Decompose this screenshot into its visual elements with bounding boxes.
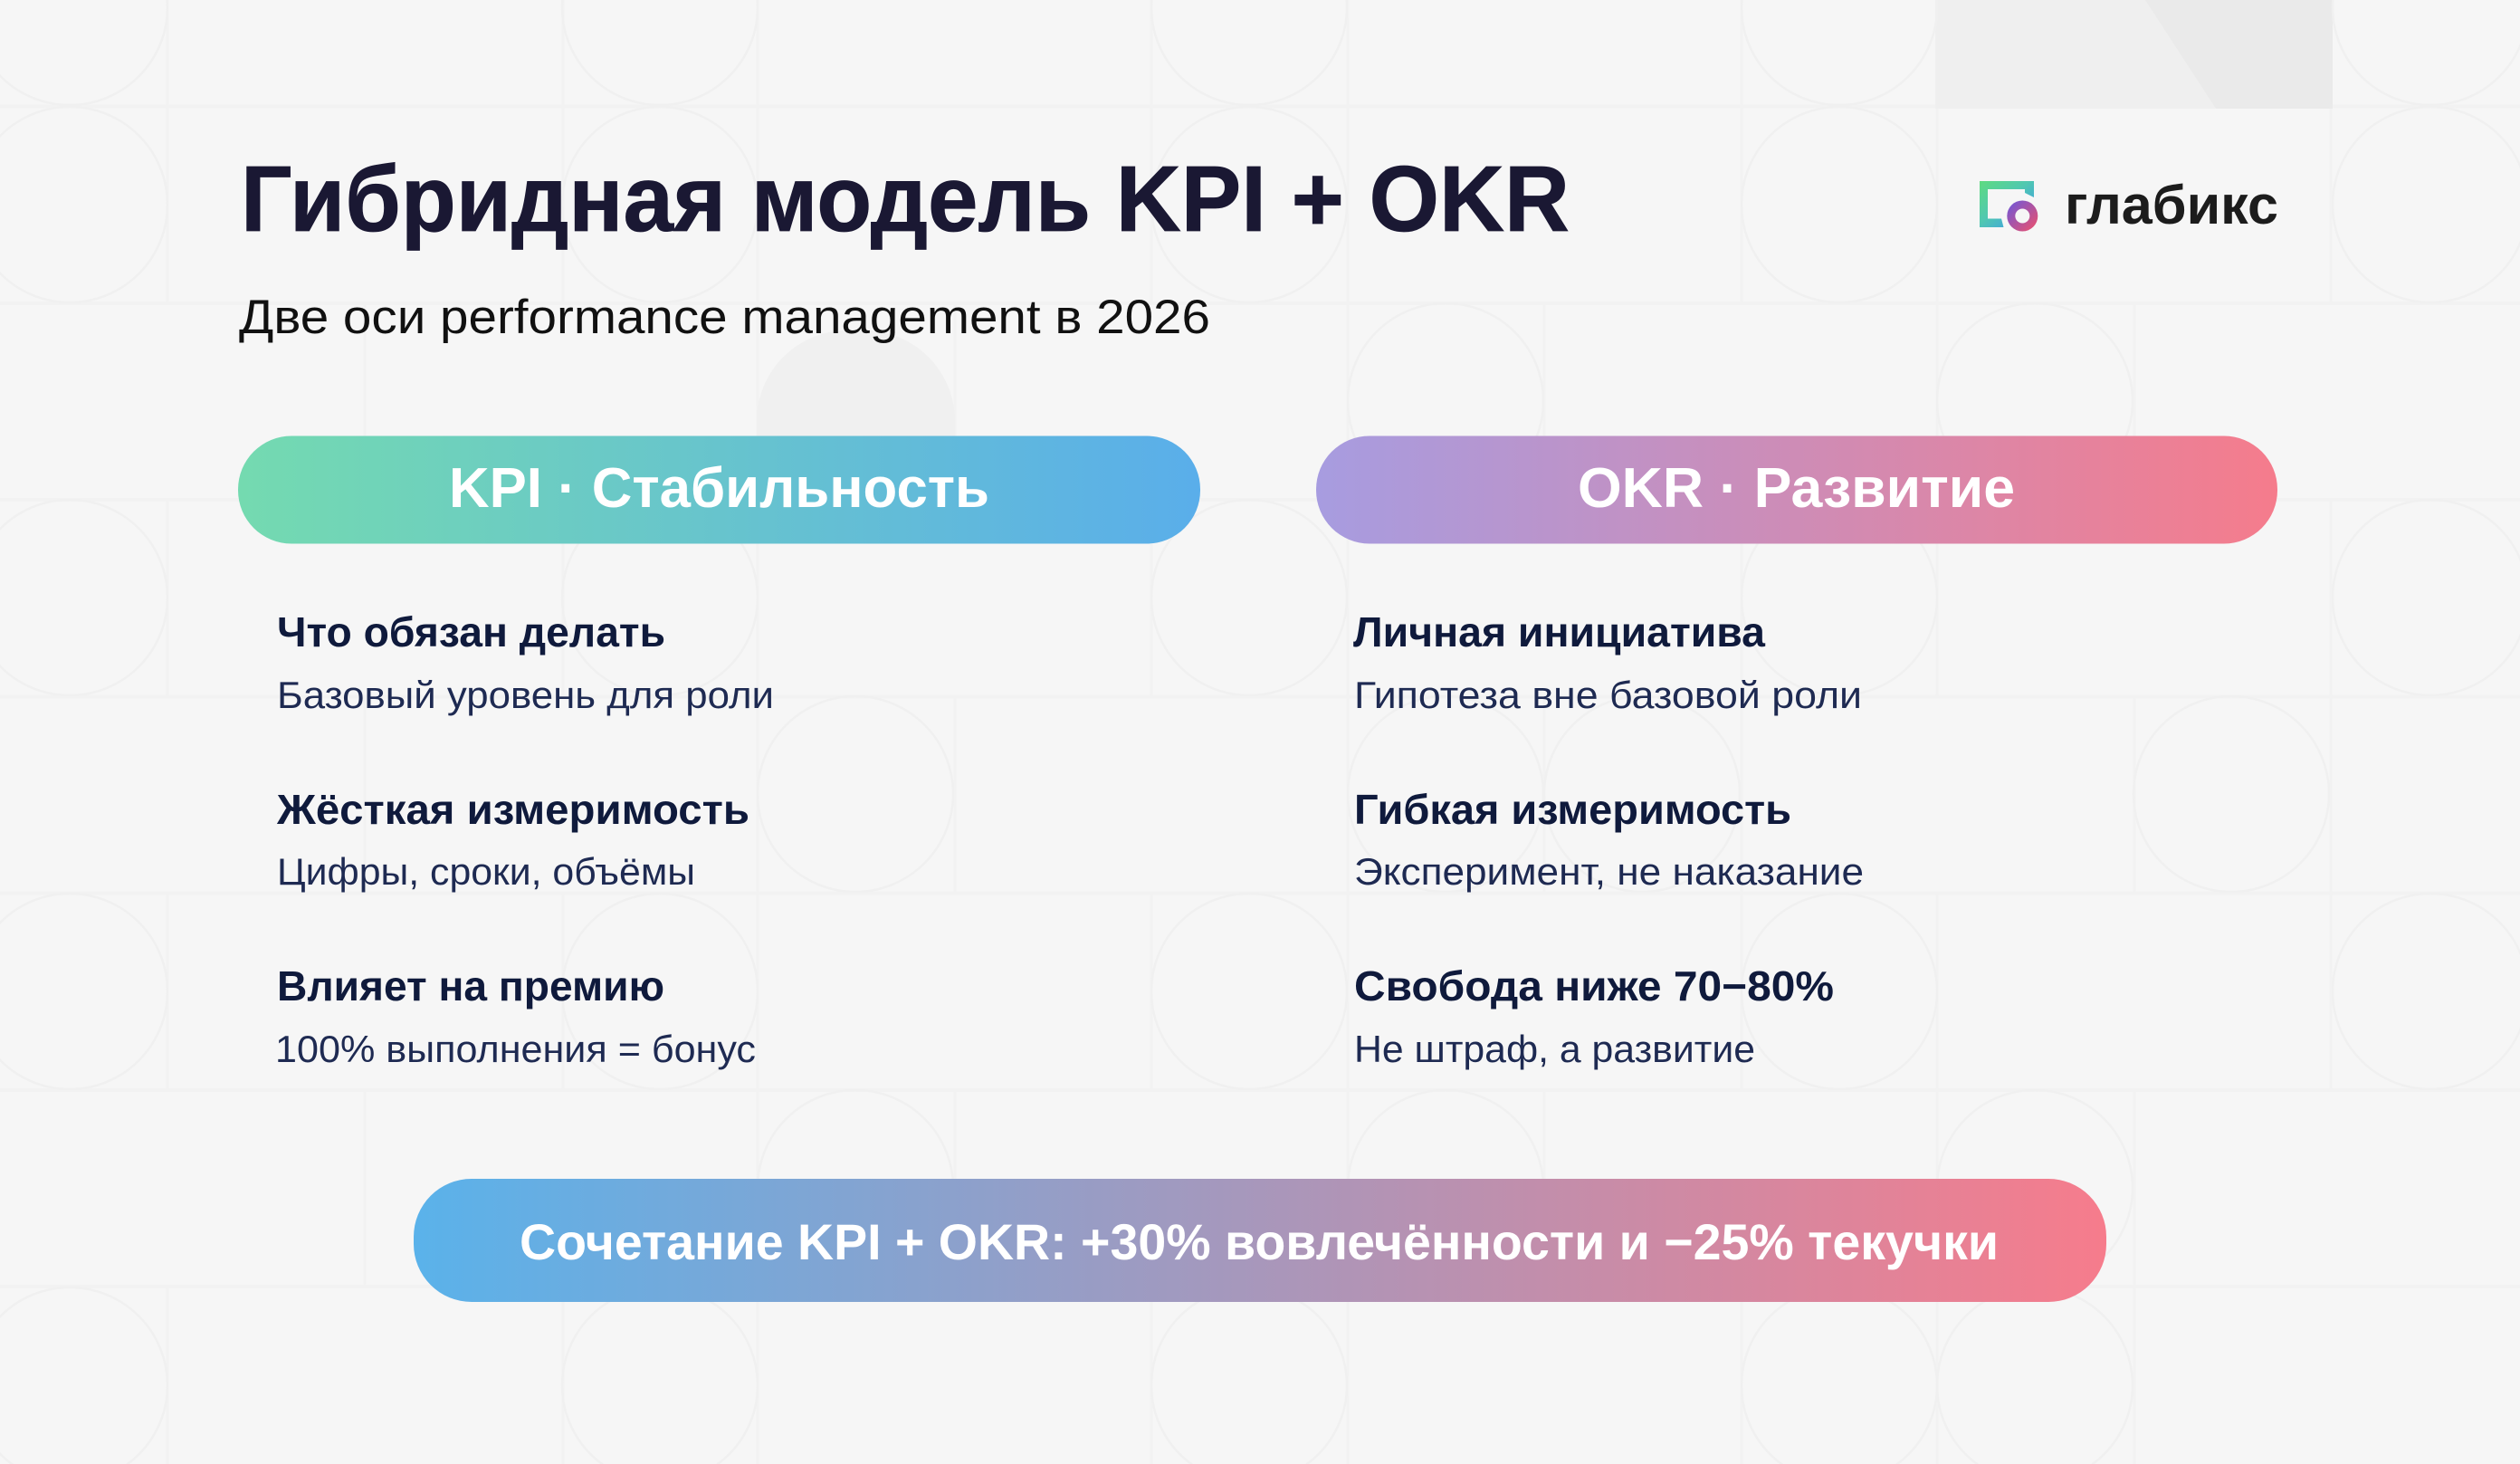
callout: combined result pill: Сочетание KPI + OKR: +30% вовлечённости и −25% текучки <box>520 1213 1999 1270</box>
KPI item 1: Базовый уровень для роли <box>277 674 774 716</box>
OKR header pill: OKR · Развитие <box>1578 457 2015 520</box>
logo: glabix <box>1980 175 2278 235</box>
OKR item 2: Эксперимент, не наказание <box>1354 850 1864 893</box>
OKR item 2 <box>1354 786 1864 893</box>
KPI item 1: Что обязан делать <box>277 608 665 655</box>
OKR item 2: Гибкая измеримость <box>1354 786 1791 833</box>
icon: logo mark <box>1980 181 2038 232</box>
KPI item 1 <box>277 608 774 716</box>
KPI item 3: Влияет на премию <box>277 962 664 1009</box>
KPI item 2: Цифры, сроки, объёмы <box>277 850 695 893</box>
title: Гибридная модель KPI + OKR <box>241 147 1570 251</box>
KPI item 2: Жёсткая измеримость <box>276 786 749 833</box>
OKR item 1: Гипотеза вне базовой роли <box>1354 674 1862 716</box>
OKR header pill <box>1316 436 2277 543</box>
OKR item 1: Личная инициатива <box>1353 608 1765 655</box>
OKR item 3: Не штраф, а развитие <box>1354 1028 1755 1070</box>
logo wordmark: глабикс <box>2065 175 2278 235</box>
KPI item 3: 100% выполнения = бонус <box>275 1028 756 1070</box>
KPI item 2 <box>276 786 749 893</box>
OKR item 3 <box>1354 962 1834 1070</box>
OKR item 1 <box>1353 608 1862 716</box>
panel: OKR column <box>1316 436 2277 1070</box>
KPI item 3 <box>275 962 756 1070</box>
panel: KPI column <box>238 436 1200 1070</box>
OKR item 3: Свобода ниже 70−80% <box>1354 962 1834 1009</box>
callout: combined result pill <box>414 1179 2106 1302</box>
subtitle: Две оси performance management в 2026 <box>239 291 1210 344</box>
KPI header pill <box>238 436 1200 543</box>
KPI header pill: KPI · Стабильность <box>449 457 989 520</box>
